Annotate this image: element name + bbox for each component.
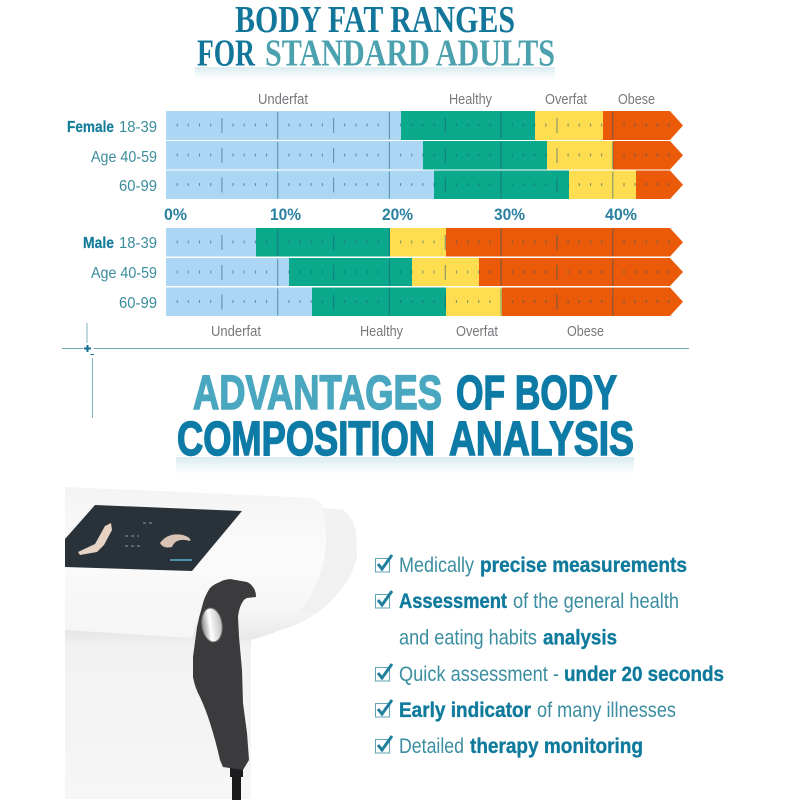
- bar chart: female body fat ranges: [166, 111, 683, 199]
- category labels: female chart: Overfat: [545, 91, 588, 108]
- row labels: male: Age 40-59: [91, 265, 157, 282]
- category labels: female chart: Obese: [618, 91, 655, 108]
- category labels: male chart: Underfat: [211, 323, 262, 340]
- row labels: male: [83, 235, 157, 312]
- heading: advantages of body composition analysis: OF BODY: [456, 367, 617, 420]
- illustration: body composition device: [65, 487, 357, 800]
- item: assessment: analysis: [543, 626, 617, 650]
- row labels: female: Female: [67, 119, 114, 136]
- heading: advantages of body composition analysis: ANALYSIS: [449, 413, 634, 466]
- device top shelf: [65, 487, 357, 640]
- item: early indicator: Early indicator: [399, 699, 531, 722]
- handheld probe cable: [230, 768, 243, 777]
- row labels: male: Male: [83, 235, 114, 252]
- row labels: male: 18-39: [119, 235, 157, 252]
- category labels: male chart: Overfat: [456, 323, 499, 340]
- item: therapy monitoring: Detailed: [399, 735, 464, 758]
- item: early indicator: of many illnesses: [537, 699, 676, 722]
- handheld probe: [193, 579, 256, 770]
- bar: male 60-99: [166, 288, 683, 316]
- category labels: female chart: Underfat: [258, 91, 309, 108]
- percent axis: 30%: [494, 205, 525, 224]
- icon: checkbox: [376, 555, 392, 572]
- item: assessment: [376, 590, 679, 650]
- item: quick assessment: [376, 663, 724, 686]
- title: body fat ranges: [195, 0, 555, 79]
- item: quick assessment: under 20 seconds: [564, 663, 724, 686]
- icon: checkbox: [376, 736, 392, 753]
- percent axis: [164, 205, 637, 224]
- item: precise measurements: Medically: [399, 554, 474, 577]
- bar: male 40-59: [166, 258, 683, 286]
- icon: checkbox: [376, 664, 392, 681]
- percent axis: 40%: [605, 205, 637, 224]
- bar: male 18-39: [166, 228, 683, 256]
- category labels: female chart: Healthy: [449, 91, 492, 108]
- row labels: female: [67, 119, 157, 195]
- title: body fat ranges: FOR: [197, 32, 255, 74]
- category labels: male chart: Healthy: [360, 323, 403, 340]
- item: assessment: of the general health: [513, 590, 679, 613]
- checklist: advantages: [376, 554, 724, 758]
- icon: crosshair divider: [62, 323, 689, 418]
- item: precise measurements: [376, 554, 687, 577]
- heading: advantages of body composition analysis: COMPOSITION: [177, 413, 435, 466]
- icon: checkbox: [376, 591, 392, 608]
- device shelf lip: [65, 598, 200, 638]
- item: assessment: Assessment: [399, 590, 507, 613]
- bar chart: male body fat ranges: [166, 228, 683, 316]
- bar: female 60-99: [166, 170, 683, 199]
- percent axis: 10%: [270, 205, 301, 224]
- item: therapy monitoring: therapy monitoring: [470, 735, 643, 758]
- row labels: female: Age 40-59: [91, 149, 157, 166]
- item: precise measurements: precise measurements: [480, 554, 687, 577]
- percent axis: 20%: [382, 205, 413, 224]
- bar: female 40-59: [166, 141, 683, 170]
- icon: checkbox: [376, 700, 392, 717]
- title: body fat ranges: BODY FAT RANGES: [235, 0, 515, 41]
- row labels: male: 60-99: [119, 295, 157, 312]
- row labels: female: 60-99: [119, 178, 157, 195]
- device column: [65, 628, 251, 799]
- item: quick assessment: Quick assessment -: [399, 663, 559, 686]
- bar: female 18-39: [166, 111, 683, 140]
- probe button: [200, 607, 224, 643]
- heading: advantages of body composition analysis: [176, 367, 634, 474]
- item: therapy monitoring: [376, 735, 643, 758]
- category labels: male chart: Obese: [567, 323, 604, 340]
- row labels: female: 18-39: [119, 119, 157, 136]
- device screen: [65, 505, 242, 571]
- title: body fat ranges: STANDARD ADULTS: [265, 32, 555, 74]
- item: early indicator: [376, 699, 676, 722]
- category labels: female chart: [258, 91, 655, 108]
- percent axis: 0%: [164, 205, 187, 224]
- device right lobe shading: [300, 508, 357, 613]
- heading: advantages of body composition analysis: ADVANTAGES: [193, 367, 442, 420]
- item: assessment: and eating habits: [399, 626, 537, 650]
- category labels: male chart: [211, 323, 604, 340]
